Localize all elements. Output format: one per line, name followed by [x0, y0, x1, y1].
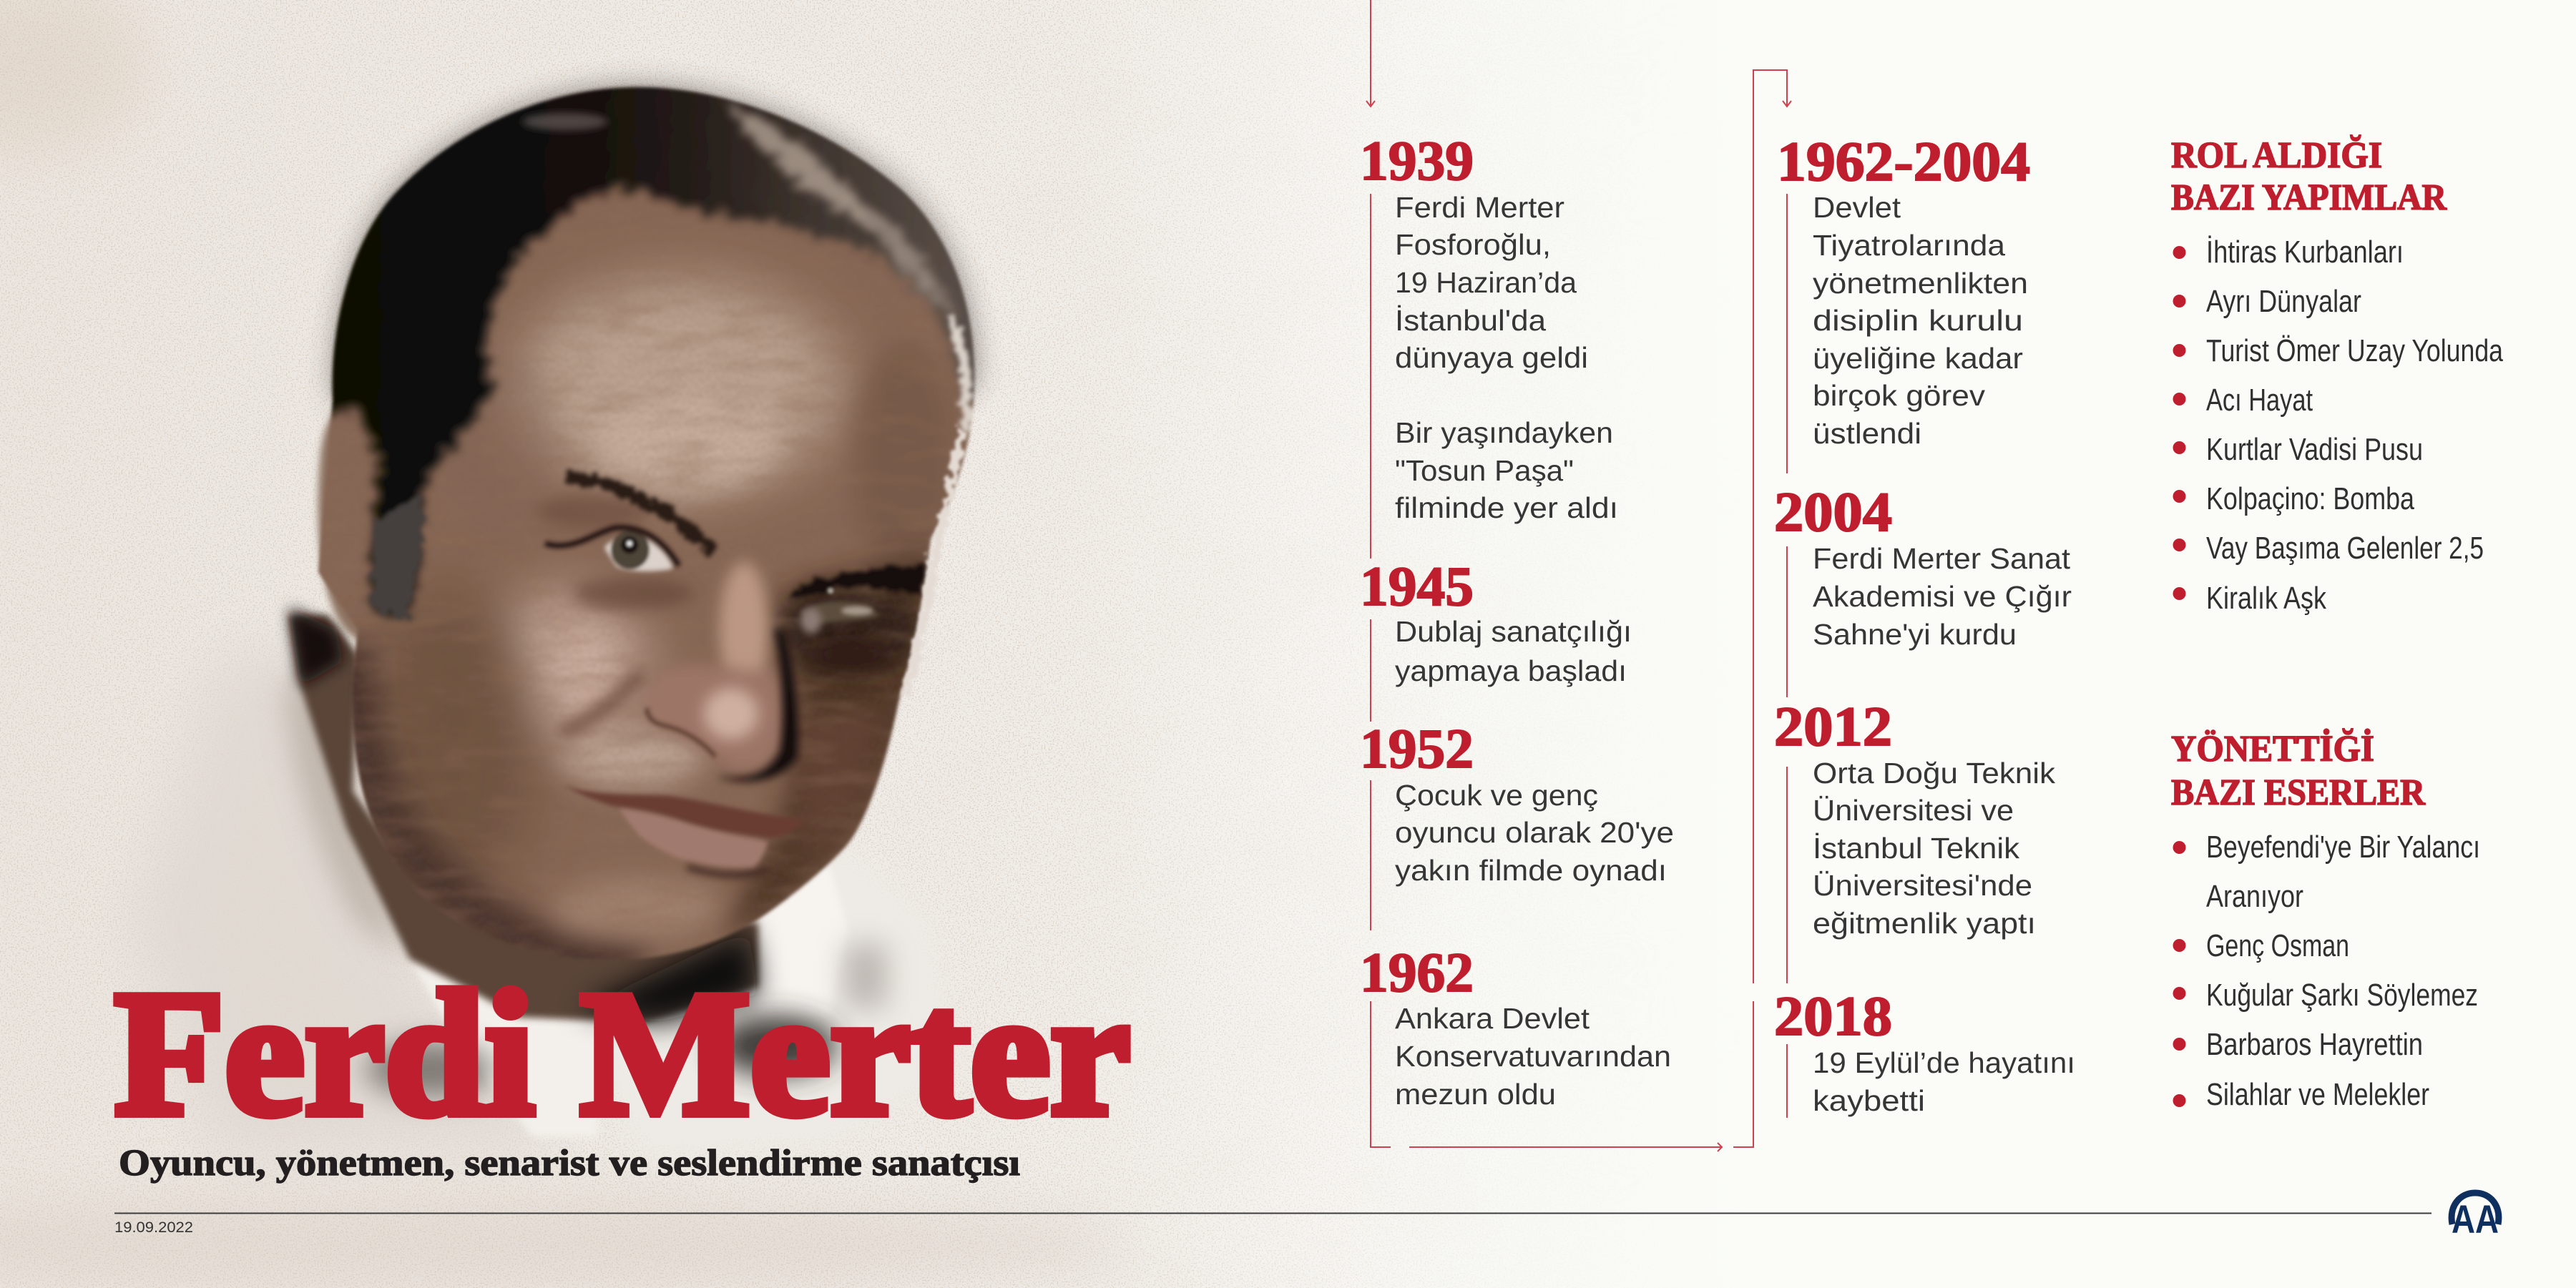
nose — [720, 561, 768, 697]
year 1945: 1945 — [1360, 555, 1474, 617]
text 1945 — [1395, 615, 1632, 687]
bullets: directed works — [2173, 841, 2186, 1107]
text 1952: Çocuk ve genç — [1395, 779, 1598, 812]
left cheek — [486, 594, 644, 744]
text 1939: Bir yaşındayken — [1395, 416, 1613, 449]
text 2012: Orta Doğu Teknik — [1813, 757, 2056, 790]
text 1962-2004: yönetmenlikten — [1813, 267, 2028, 300]
items: roles: Vay Başıma Gelenler 2,5 — [2206, 531, 2484, 566]
lips — [563, 785, 806, 875]
head and face — [316, 84, 977, 960]
items: directed works: Aranıyor — [2206, 879, 2303, 914]
heading: roles — [2171, 134, 2447, 218]
text 1945: Dublaj sanatçılığı — [1395, 615, 1632, 648]
text 2012 — [1813, 757, 2056, 940]
left eye — [545, 528, 679, 571]
text 1962-2004: Devlet — [1813, 191, 1901, 224]
text 1939: "Tosun Paşa" — [1395, 454, 1574, 487]
text 1939: 19 Haziran’da — [1395, 266, 1577, 299]
items: roles: İhtiras Kurbanları — [2206, 235, 2404, 270]
items: roles: Acı Hayat — [2206, 383, 2313, 418]
text 1952 — [1395, 779, 1674, 887]
heading: roles: ROL ALDIĞI — [2171, 134, 2382, 176]
panel: roles list — [2171, 134, 2503, 616]
forehead light — [515, 279, 844, 493]
subtitle: Oyuncu, yönetmen, senarist ve seslendirme sanatçısı — [119, 1143, 1020, 1184]
items: roles: Kurtlar Vadisi Pusu — [2206, 432, 2423, 467]
text 1962: mezun oldu — [1395, 1078, 1556, 1111]
items: roles: Turist Ömer Uzay Yolunda — [2206, 333, 2503, 368]
timeline column 1 — [1360, 129, 1674, 1111]
text 2012: İstanbul Teknik — [1813, 832, 2020, 865]
sideburn — [371, 493, 423, 619]
items: directed works — [2206, 830, 2480, 1112]
text 2012: eğitmenlik yaptı — [1813, 907, 2036, 940]
heading: directed works: BAZI ESERLER — [2171, 772, 2426, 813]
text 2004: Akademisi ve Çığır — [1813, 580, 2072, 613]
text 1939: Ferdi Merter — [1395, 191, 1564, 224]
right shaded side — [715, 551, 937, 944]
year 1962-2004: 1962-2004 — [1777, 130, 2030, 192]
hair — [286, 36, 1016, 619]
heading: roles: BAZI YAPIMLAR — [2171, 177, 2447, 218]
text 2004: Sahne'yi kurdu — [1813, 618, 2017, 651]
text 1962-2004: birçok görev — [1813, 379, 1986, 412]
text 1939: filminde yer aldı — [1395, 491, 1618, 524]
hair highlights — [522, 100, 967, 429]
arrow: into 1939 — [1366, 0, 1375, 107]
text 2012: Üniversitesi'nde — [1813, 869, 2032, 902]
title: Ferdi Merter: Ferdi Merter — [114, 955, 1130, 1153]
items: directed works: Barbaros Hayrettin — [2206, 1027, 2423, 1062]
text 2004: Ferdi Merter Sanat — [1813, 542, 2071, 575]
text 2004 — [1813, 542, 2072, 651]
right eye and brow — [787, 565, 925, 669]
text 2018: 19 Eylül’de hayatını — [1813, 1046, 2075, 1079]
text 1962: Ankara Devlet — [1395, 1002, 1590, 1035]
text 1939: Fosforoğlu, — [1395, 228, 1551, 261]
text 2012: Üniversitesi ve — [1813, 794, 2014, 827]
text 1952: yakın filmde oynadı — [1395, 854, 1667, 887]
timeline connector lines — [1366, 0, 1791, 1151]
text 1962-2004: üyeliğine kadar — [1813, 342, 2023, 375]
items: directed works: Genç Osman — [2206, 928, 2349, 963]
year 2018: 2018 — [1774, 985, 1892, 1047]
paper background — [0, 0, 1611, 1288]
bullets: roles — [2173, 246, 2186, 600]
year 1952: 1952 — [1360, 717, 1474, 780]
soft hair halo — [336, 87, 974, 400]
upper lip skin — [562, 728, 705, 788]
text 1962-2004: disiplin kurulu — [1813, 304, 2023, 337]
heading: directed works: YÖNETTİĞİ — [2171, 728, 2374, 770]
text 2018 — [1813, 1046, 2075, 1117]
neck — [289, 608, 758, 1023]
text 1945: yapmaya başladı — [1395, 654, 1627, 687]
text 1962-2004 — [1813, 191, 2028, 450]
icon: AA logo: AA — [2452, 1196, 2499, 1242]
portrait photo of Ferdi Merter — [129, 36, 1016, 1159]
items: directed works: Kuğular Şarkı Söylemez — [2206, 978, 2478, 1013]
shirt and shoulders — [129, 644, 959, 1159]
right face edge highlight — [906, 429, 962, 697]
text 1952: oyuncu olarak 20'ye — [1395, 816, 1674, 849]
year 2012: 2012 — [1774, 695, 1892, 757]
year 2004: 2004 — [1774, 481, 1892, 543]
items: directed works: Silahlar ve Melekler — [2206, 1077, 2429, 1112]
text 1939: dünyaya geldi — [1395, 341, 1588, 374]
text 1962 — [1395, 1002, 1671, 1111]
text 2018: kaybetti — [1813, 1084, 1925, 1117]
items: roles: Kolpaçino: Bomba — [2206, 481, 2414, 516]
footer rule — [114, 1213, 2431, 1214]
skin texture — [286, 64, 1001, 994]
items: roles: Ayrı Dünyalar — [2206, 284, 2361, 319]
text 1939: İstanbul'da — [1395, 304, 1546, 337]
arrow: bottom connector to next column — [1371, 70, 1791, 1151]
chin — [551, 878, 723, 938]
items: directed works: Beyefendi'ye Bir Yalancı — [2206, 830, 2480, 865]
year 1962: 1962 — [1360, 941, 1474, 1003]
items: roles — [2206, 235, 2503, 616]
ear — [318, 405, 390, 641]
text 1962-2004: Tiyatrolarında — [1813, 229, 2005, 262]
panel: directed works list — [2171, 728, 2480, 1112]
heading: directed works — [2171, 728, 2426, 813]
date: 19.09.2022 — [114, 1219, 193, 1236]
text 1962: Konservatuvarından — [1395, 1040, 1671, 1073]
text 1939 — [1395, 191, 1618, 524]
timeline column 2 — [1774, 130, 2075, 1117]
left eye socket and brow — [572, 578, 694, 609]
year 1939: 1939 — [1360, 129, 1474, 192]
items: roles: Kiralık Aşk — [2206, 581, 2327, 616]
text 1962-2004: üstlendi — [1813, 417, 1921, 450]
